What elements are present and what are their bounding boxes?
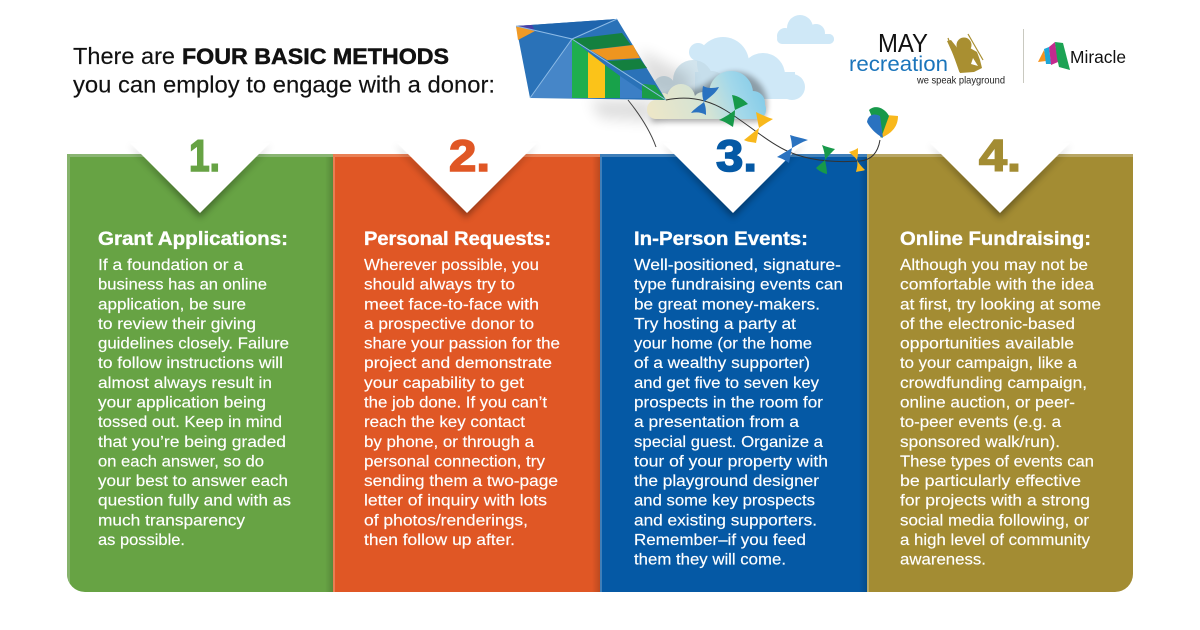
bow blue 2 — [777, 135, 808, 163]
panel text: Grant Applications — [98, 229, 291, 549]
front cloud shadow — [652, 72, 767, 122]
logo: May Recreation: recreation — [849, 53, 948, 76]
notches — [130, 143, 1070, 213]
bow yellow 2 — [849, 148, 865, 172]
panel text: In-Person Events: special guest. Organize a — [634, 434, 823, 451]
panel: green — [67, 154, 334, 592]
logo: May Recreation — [849, 28, 1005, 86]
panel text: Grant Applications: on each answer, so do — [98, 453, 264, 470]
logo: Miracle — [1038, 42, 1126, 70]
panel text: Online Fundraising: of the electronic-based — [900, 316, 1075, 333]
panel text: Grant Applications: your best to answer each — [98, 473, 288, 490]
notch shadows — [128, 144, 1072, 218]
panel text: In-Person Events: be great money-makers. — [634, 296, 820, 313]
panel text: Personal Requests: Wherever possible, you — [364, 257, 539, 274]
panel text: Personal Requests: Personal Requests: — [364, 229, 551, 250]
panel: blue — [600, 154, 867, 592]
panel text: In-Person Events: them they will come. — [634, 552, 786, 569]
logo: May Recreation: we speak playground — [916, 74, 1005, 86]
panel text: In-Person Events: prospects in the room for — [634, 394, 823, 412]
panel text: Online Fundraising: sponsored walk/run). — [900, 434, 1060, 451]
panel text: Online Fundraising: These types of events can — [900, 453, 1094, 470]
icon: large cloud — [689, 37, 805, 100]
panel text: In-Person Events: Well-positioned, signature- — [634, 257, 841, 274]
title — [73, 43, 495, 98]
panel text: Personal Requests — [364, 229, 560, 549]
panel text: Personal Requests: sending them a two-page — [364, 473, 558, 490]
panel text: In-Person Events: Try hosting a party at — [634, 316, 797, 333]
panel text: Grant Applications: that you’re being graded — [98, 434, 286, 451]
panel text: Personal Requests: then follow up after. — [364, 532, 515, 549]
logo divider — [1023, 29, 1024, 83]
panel text: Grant Applications: much transparency — [98, 512, 245, 529]
panel text: Personal Requests: a prospective donor to — [364, 316, 534, 333]
panel: orange — [333, 154, 600, 592]
panel text: In-Person Events: a presentation from a — [634, 414, 799, 431]
panel text: Grant Applications: almost always result in — [98, 375, 272, 392]
panels background — [67, 143, 1133, 592]
panel text: Personal Requests: by phone, or through a — [364, 434, 534, 451]
panel text: In-Person Events: tour of your property with — [634, 453, 828, 470]
number: 3: 3. — [716, 132, 757, 181]
panel text: Grant Applications: as possible. — [98, 532, 185, 549]
panel text: Online Fundraising: online auction, or peer- — [900, 394, 1075, 412]
panel text: Grant Applications: your application being — [98, 394, 266, 412]
panel text: Grant Applications: If a foundation or a — [98, 257, 243, 274]
panel text: Online Fundraising: crowdfunding campaign, — [900, 375, 1087, 392]
panel text: Online Fundraising: opportunities available — [900, 336, 1074, 353]
icon: child on swing — [947, 34, 983, 73]
panel text: Online Fundraising: at first, try looking at some — [900, 296, 1101, 313]
panel text: Grant Applications: business has an online — [98, 277, 267, 294]
panel text: Personal Requests: meet face-to-face with — [364, 296, 539, 313]
kite shadow — [590, 50, 690, 122]
panel: gold — [867, 154, 1133, 592]
panel text: Online Fundraising: awareness. — [900, 552, 986, 569]
bow green — [719, 95, 748, 127]
panel text: Personal Requests: personal connection, try — [364, 453, 545, 470]
panel text: Personal Requests: letter of inquiry with lots — [364, 493, 547, 510]
panel text: Grant Applications: to review their giving — [98, 316, 256, 333]
panel text: Online Fundraising — [900, 229, 1101, 569]
panel text: Grant Applications: application, be sure — [98, 296, 246, 313]
panel text: Online Fundraising: comfortable with the idea — [900, 277, 1094, 294]
kite tail with bows — [628, 86, 898, 174]
panel text: In-Person Events: Remember–if you feed — [634, 532, 806, 549]
panel text: Online Fundraising: a high level of community — [900, 532, 1090, 549]
icon: small cloud — [777, 15, 834, 44]
title: FOUR BASIC METHODS — [182, 44, 449, 69]
logo: Miracle: Miracle — [1070, 47, 1126, 67]
bow yellow — [744, 112, 773, 143]
panel text: Online Fundraising: Although you may not be — [900, 257, 1088, 274]
panel text: Personal Requests: should always try to — [364, 277, 515, 294]
front cloud — [647, 71, 766, 119]
number: 4: 4. — [979, 132, 1021, 181]
bow green 2 — [816, 145, 835, 174]
number: 2: 2. — [449, 132, 490, 181]
panel text: In-Person Events — [634, 229, 843, 569]
title: you can employ to engage with a donor: — [73, 72, 495, 98]
panel text: In-Person Events: the playground designer — [634, 473, 819, 490]
panel text: In-Person Events: and some key prospects — [634, 493, 815, 510]
panel text: Grant Applications: question fully and with as — [98, 493, 291, 510]
panel text: In-Person Events: and existing supporters. — [634, 512, 817, 529]
panel text: Grant Applications: to follow instructions will — [98, 355, 283, 372]
bow blue — [691, 86, 719, 115]
panel text: Grant Applications: Grant Applications: — [98, 229, 288, 250]
panel text: Personal Requests: reach the key contact — [364, 414, 526, 431]
panel text: Online Fundraising: to your campaign, like a — [900, 355, 1077, 372]
panel text: In-Person Events: your home (or the home — [634, 336, 812, 353]
title: There are — [73, 43, 175, 69]
panel text: Online Fundraising: Online Fundraising: — [900, 229, 1091, 250]
small kite — [867, 107, 898, 138]
panel text: Online Fundraising: be particularly effective — [900, 473, 1081, 490]
panel text: Personal Requests: of photos/renderings, — [364, 512, 528, 529]
illustration: clouds — [590, 15, 834, 122]
panel text: Online Fundraising: to-peer events (e.g. a — [900, 414, 1061, 431]
panel text: Personal Requests: the job done. If you can’t — [364, 394, 548, 412]
illustration: kite — [516, 19, 666, 100]
panel text: Grant Applications: tossed out. Keep in mind — [98, 414, 282, 431]
panel text: Online Fundraising: for projects with a strong — [900, 493, 1090, 510]
panel text: In-Person Events: of a wealthy supporter) — [634, 355, 810, 372]
panel text: Online Fundraising: social media following, or — [900, 512, 1089, 529]
panel text: In-Person Events: type fundraising events can — [634, 277, 843, 294]
icon: faint mid cloud — [653, 60, 726, 100]
panel text: In-Person Events: In-Person Events: — [634, 229, 808, 250]
panel text: Personal Requests: your capability to get — [364, 375, 525, 392]
panel text: In-Person Events: and get five to seven key — [634, 375, 819, 392]
panel text: Grant Applications: guidelines closely. Failure — [98, 336, 289, 353]
panel text: Personal Requests: share your passion for the — [364, 336, 560, 353]
number: 1: 1. — [189, 132, 220, 181]
panel text: Personal Requests: project and demonstrate — [364, 355, 552, 372]
logo: May Recreation: MAY — [878, 28, 928, 58]
